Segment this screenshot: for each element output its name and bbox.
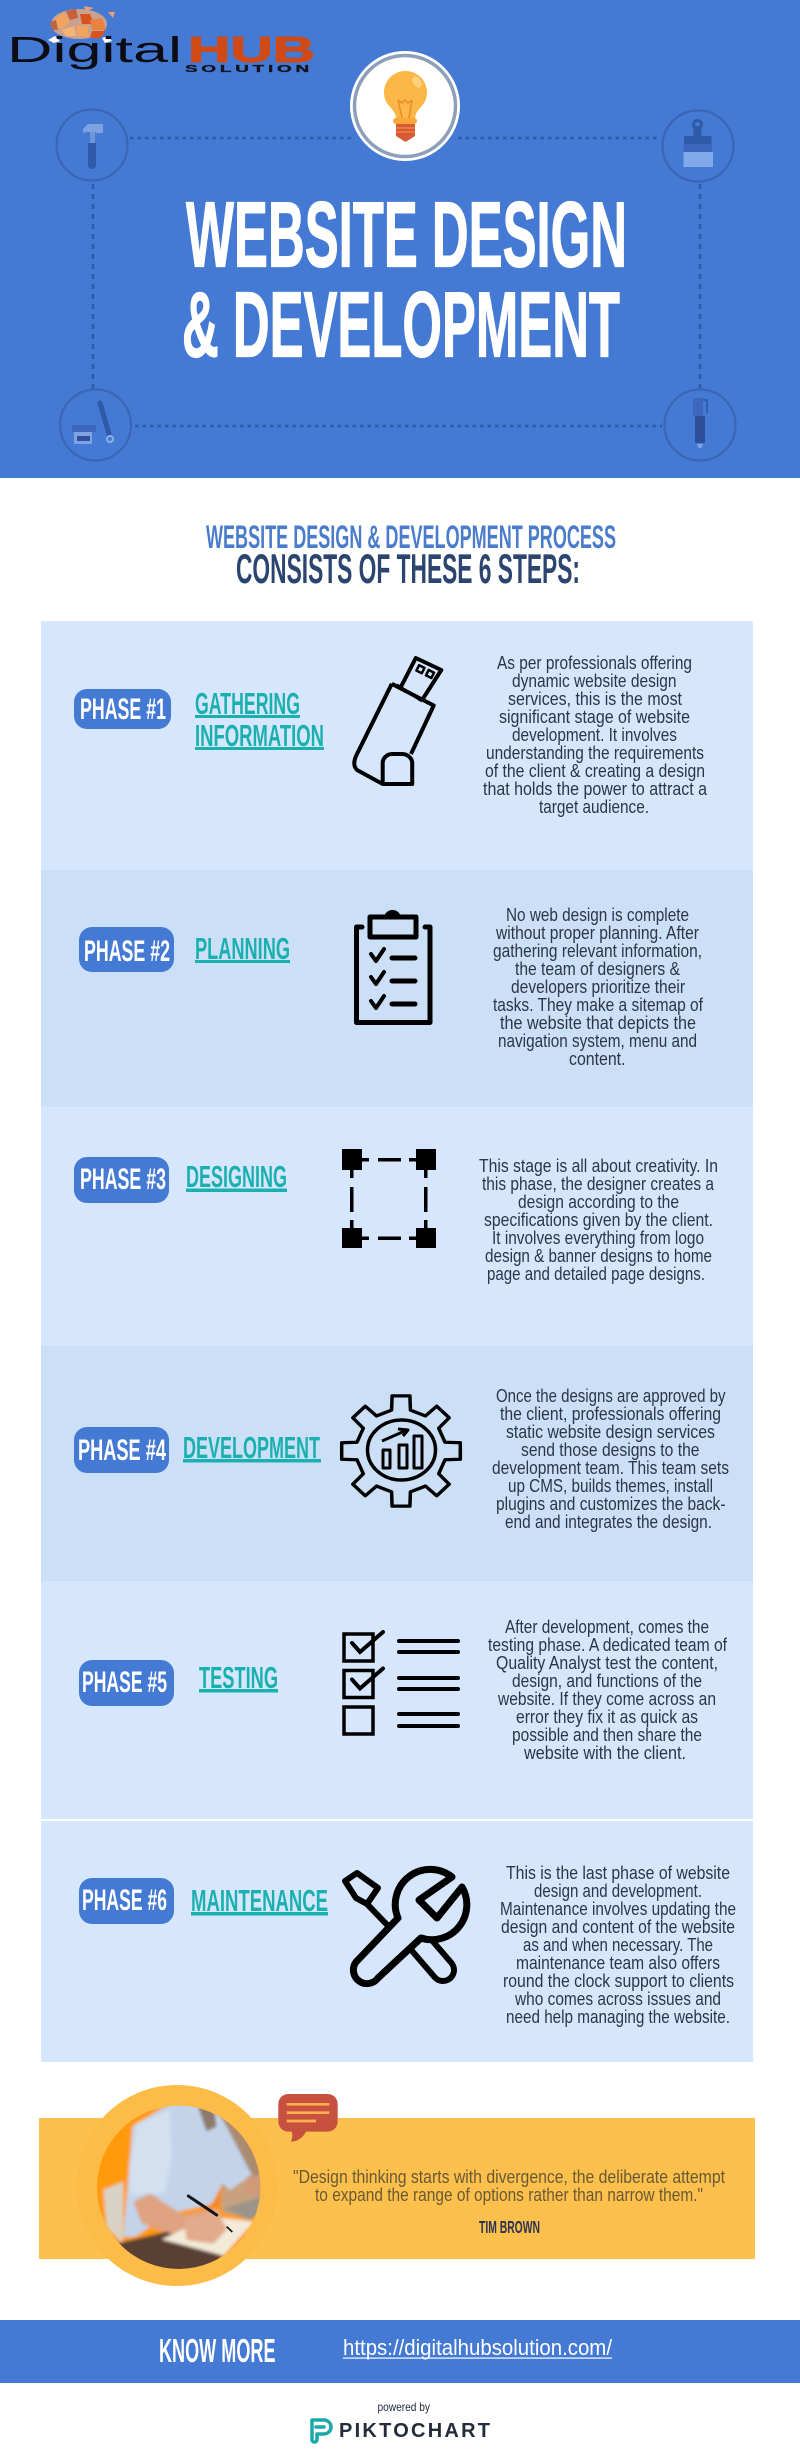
text: phase 1 description: understanding the requirements (486, 743, 704, 763)
text: phase 1 description (483, 653, 708, 817)
icon: light bulb medallion (350, 51, 460, 161)
text: phase 5 description: After development, comes the (505, 1617, 709, 1637)
text: phase 6 description: maintenance team also offers (516, 1953, 720, 1973)
badge: phase 4: PHASE #4 (78, 1434, 166, 1467)
text: phase 1 description: development. It involves (512, 725, 677, 745)
badge: phase 6: PHASE #6 (82, 1884, 167, 1917)
label: designing (186, 1159, 287, 1194)
badge: phase 1 (74, 689, 171, 729)
panel: phase 3 designing (41, 1107, 753, 1346)
credit: powered by piktochart: powered by (378, 2400, 430, 2414)
text: phase 6 description: need help managing the website. (506, 2007, 730, 2027)
text: phase 5 description: design, and functions of the (512, 1671, 702, 1691)
text: phase 3 description: design & banner designs to home (485, 1246, 712, 1266)
text: phase 6 description: design and development. (534, 1881, 702, 1901)
badge: phase 3 (74, 1157, 169, 1203)
text: phase 2 description: developers prioritize their (511, 977, 685, 997)
icon: gear with chart (342, 1396, 460, 1506)
icon: speech bubble (278, 2094, 338, 2142)
credit: powered by piktochart (312, 2400, 490, 2442)
logo: Digital HUB Solution: Digital (7, 29, 182, 70)
title (182, 182, 627, 376)
photo: man writing in notebook (97, 2106, 260, 2269)
text: phase 5 description: Quality Analyst test the content, (496, 1653, 718, 1673)
badge: phase 2: PHASE #2 (84, 935, 170, 968)
label: development: DEVELOPMENT (183, 1430, 320, 1465)
text: phase 3 description: This stage is all about creativity. In (479, 1156, 718, 1176)
text: phase 4 description: plugins and customizes the back- (496, 1494, 726, 1514)
label: gathering information: INFORMATION (195, 718, 324, 753)
label: development (183, 1430, 321, 1465)
label: gathering information: GATHERING (195, 686, 300, 721)
text: quote: "Design thinking starts with divergence, the deliberate attempt (293, 2167, 725, 2187)
text: phase 2 description: No web design is complete (506, 905, 689, 925)
icon: ink jar and pen nib (60, 390, 131, 460)
text: phase 2 description (493, 905, 704, 1069)
logo: Digital HUB Solution (7, 6, 315, 75)
badge: phase 4 (74, 1427, 169, 1473)
text: phase 1 description: services, this is the most (508, 689, 682, 709)
text: phase 4 description: up CMS, builds themes, install (508, 1476, 713, 1496)
text: phase 4 description: send those designs to the (521, 1440, 700, 1460)
text: phase 5 description (488, 1617, 728, 1763)
label: gathering information (195, 686, 324, 753)
panel: phase 6 maintenance (41, 1821, 753, 2062)
panel: phase 5 testing (41, 1581, 753, 1819)
text: phase 1 description: dynamic website design (512, 671, 676, 691)
icon: checklist (344, 1632, 458, 1734)
badge: phase 5: PHASE #5 (82, 1666, 167, 1699)
text: phase 3 description: this phase, the designer creates a (482, 1174, 715, 1194)
text: phase 4 description: end and integrates the design. (505, 1512, 712, 1532)
icon: clipboard checklist (356, 912, 430, 1022)
heading: process intro (206, 519, 616, 592)
text: phase 2 description: content. (569, 1049, 626, 1069)
logo: Digital HUB Solution: SOLUTION (185, 64, 313, 75)
icon: usb drive (354, 658, 441, 784)
text: phase 1 description: As per professionals offering (497, 653, 692, 673)
text: phase 4 description: Once the designs are approved by (496, 1386, 726, 1406)
text: phase 5 description: possible and then share the (512, 1725, 702, 1745)
label: testing: TESTING (199, 1660, 278, 1695)
text: phase 2 description: gathering relevant information, (493, 941, 702, 961)
logo: Digital HUB Solution: HUB (188, 29, 315, 70)
text: phase 3 description: page and detailed page designs. (487, 1264, 705, 1284)
text: phase 1 description: that holds the power to attract a (483, 779, 708, 799)
text: phase 4 description: development team. This team sets (492, 1458, 729, 1478)
text: phase 4 description: the client, professionals offering (500, 1404, 721, 1424)
badge: phase 6 (79, 1878, 174, 1924)
text: phase 3 description: design according to the (518, 1192, 679, 1212)
text: phase 6 description: as and when necessary. The (523, 1935, 713, 1955)
label: designing: DESIGNING (186, 1159, 287, 1194)
icon: mosaic globe (48, 6, 115, 43)
text: quote: to expand the range of options rather than narrow them." (315, 2185, 703, 2205)
text: phase 3 description: specifications given by the client. (484, 1210, 713, 1230)
panel: footer call to action (0, 2320, 800, 2383)
label: planning (195, 931, 290, 966)
label: planning: PLANNING (195, 931, 290, 966)
text: phase 6 description: design and content of the website (501, 1917, 735, 1937)
text: phase 6 description (500, 1863, 736, 2027)
text: phase 5 description: error they fix it as quick as (516, 1707, 698, 1727)
text: phase 3 description (479, 1156, 718, 1284)
text: phase 1 description: target audience. (539, 797, 649, 817)
text: phase 5 description: website. If they come across an (497, 1689, 716, 1709)
icon: piktochart mark (312, 2420, 331, 2442)
text: phase 2 description: tasks. They make a sitemap of (493, 995, 704, 1015)
icon: selection frame (342, 1149, 436, 1248)
text: phase 6 description: round the clock support to clients (503, 1971, 734, 1991)
text: phase 6 description: This is the last phase of website (506, 1863, 730, 1883)
panel: quote band (39, 2085, 755, 2286)
credit: powered by piktochart: PIKTOCHART (339, 2420, 490, 2442)
text: phase 2 description: navigation system, menu and (498, 1031, 697, 1051)
text: phase 4 description (492, 1386, 729, 1532)
text: phase 6 description: Maintenance involves updating the (500, 1899, 736, 1919)
text: phase 4 description: static website design services (506, 1422, 715, 1442)
text: phase 5 description: testing phase. A dedicated team of (488, 1635, 728, 1655)
text: phase 1 description: significant stage of website (499, 707, 690, 727)
text: quote (293, 2167, 725, 2205)
badge: phase 5 (79, 1660, 174, 1706)
panel: phase 1 gathering information (41, 621, 753, 870)
text: phase 3 description: It involves everything from logo (492, 1228, 704, 1248)
label: maintenance (191, 1883, 328, 1918)
icon: marker pen (664, 390, 736, 460)
label: testing (199, 1660, 278, 1695)
text: phase 2 description: the website that depicts the (500, 1013, 696, 1033)
text: phase 2 description: without proper planning. After (495, 923, 699, 943)
badge: phase 2 (79, 927, 174, 972)
text: phase 2 description: the team of designers & (515, 959, 680, 979)
text: know more: KNOW MORE (159, 2333, 276, 2370)
icon: wrench and screwdriver (345, 1869, 467, 1984)
text: phase 1 description: of the client & creating a design (485, 761, 705, 781)
label: maintenance: MAINTENANCE (191, 1883, 328, 1918)
badge: phase 1: PHASE #1 (80, 693, 166, 726)
panel: header banner (0, 0, 800, 478)
text: phase 5 description: website with the client. (523, 1743, 686, 1763)
badge: phase 3: PHASE #3 (80, 1163, 166, 1196)
icon: paint brush (662, 110, 734, 182)
icon: hammer (56, 110, 128, 180)
text: phase 6 description: who comes across issues and (514, 1989, 721, 2009)
panel: phase 4 development (41, 1346, 753, 1581)
link: website url: https://digitalhubsolution.com/ (343, 2335, 613, 2360)
text: quote author: TIM BROWN (479, 2217, 540, 2237)
panel: phase 2 planning (41, 870, 753, 1107)
